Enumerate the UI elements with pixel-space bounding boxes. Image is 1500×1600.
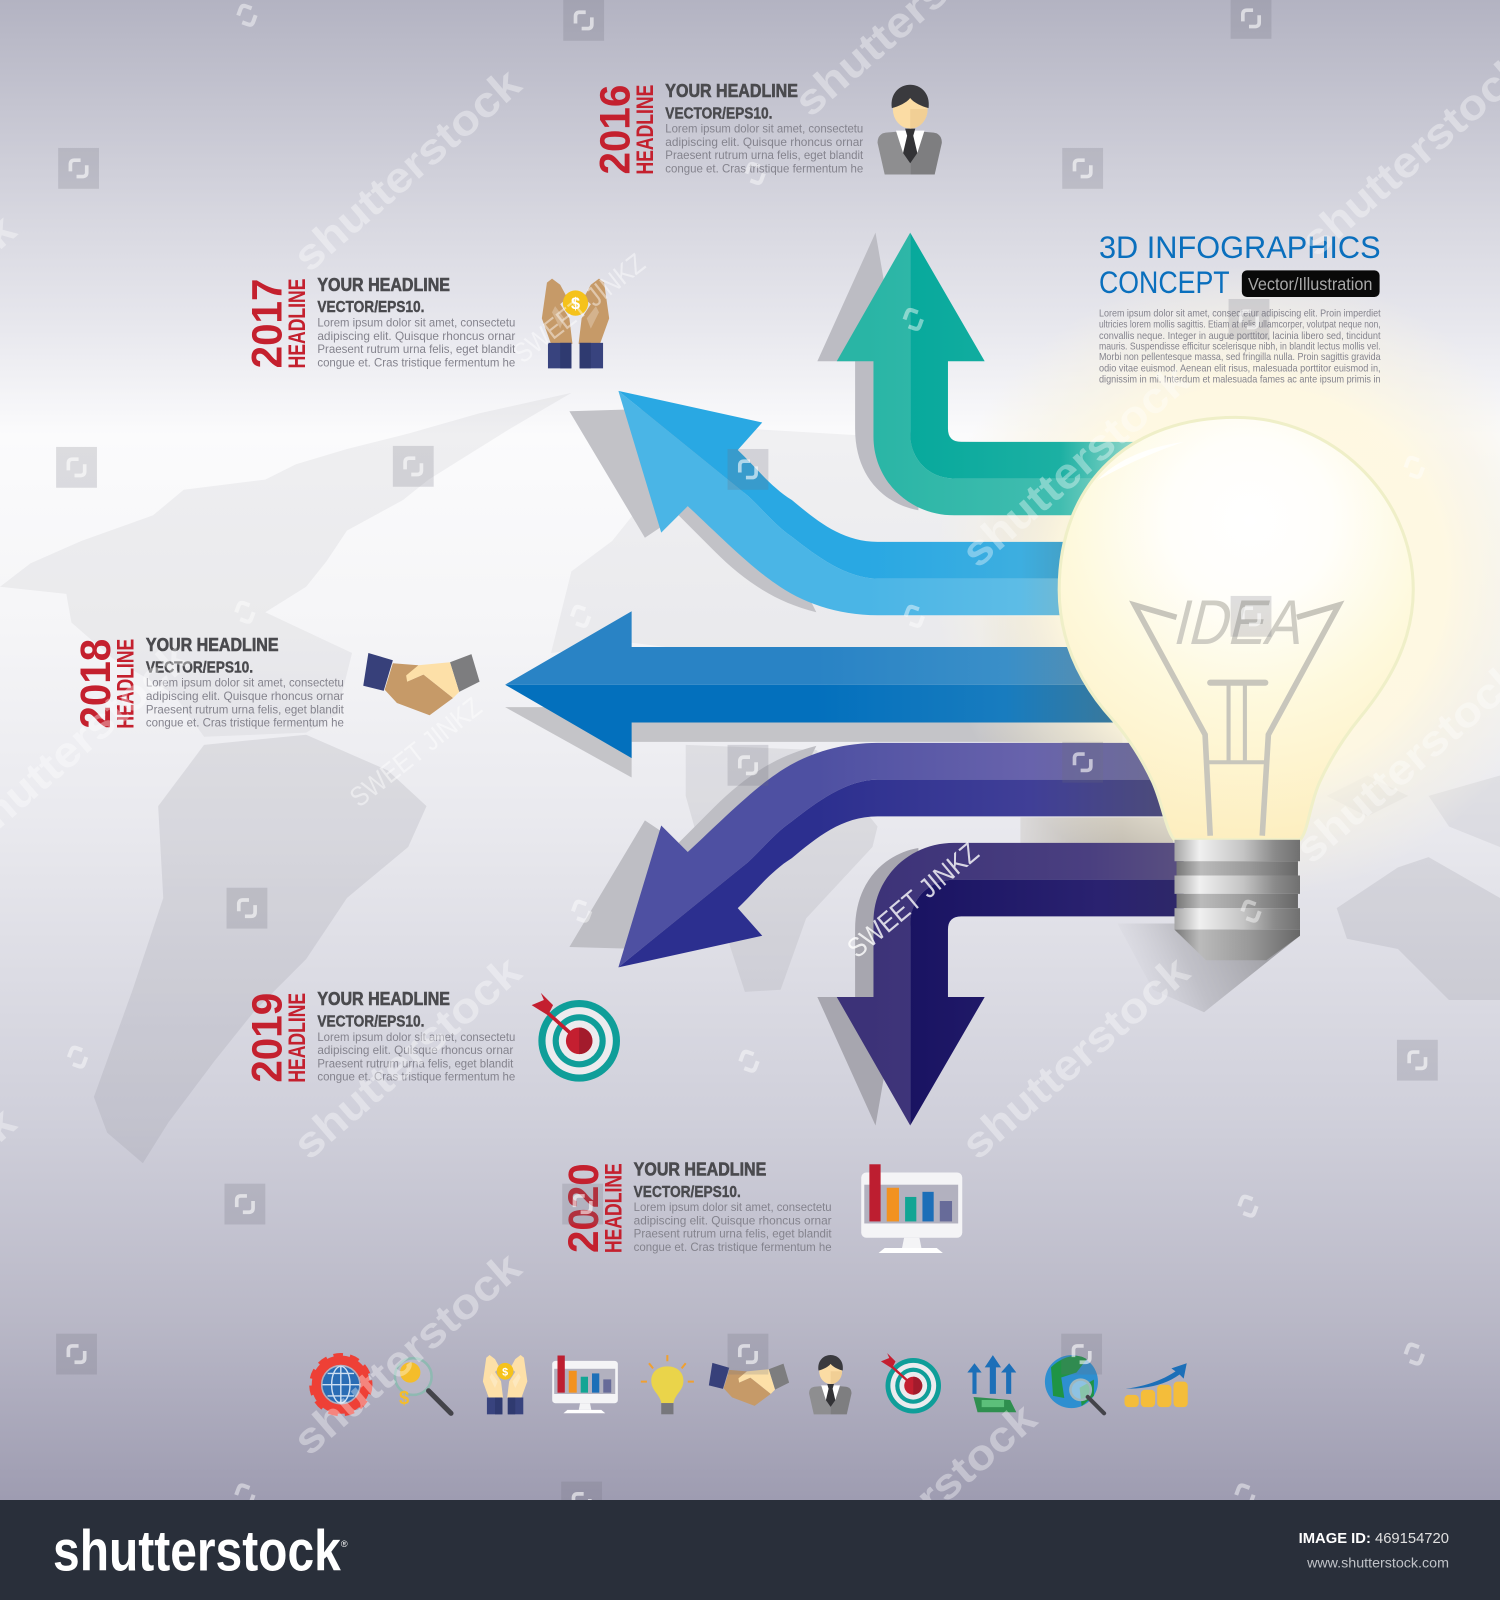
site url: www.shutterstock.com: [1306, 1555, 1449, 1571]
text block: 2019: adipiscing elit. Quisque rhoncus ornar: [317, 1044, 513, 1057]
text block: 2020: congue et. Cras tristique fermentum he: [634, 1241, 832, 1254]
title: CONCEPT: [1099, 264, 1230, 300]
arrow 2018: blue left: [505, 611, 1133, 758]
text block: 2017: HEADLINE: [284, 279, 311, 368]
icon: target: [532, 993, 620, 1082]
registered mark: ®: [341, 1539, 348, 1549]
text block: 2018: congue et. Cras tristique fermentum he: [146, 717, 344, 730]
text block: 2019: HEADLINE: [284, 993, 311, 1083]
text block: 2020: 2020: [560, 1163, 608, 1253]
icon: gear globe: [312, 1356, 369, 1413]
SWEET JINKZ watermarks: SWEET JINKZ: [841, 836, 985, 964]
metal screw base: [1174, 840, 1300, 960]
SWEET JINKZ watermarks: SWEET JINKZ: [344, 691, 488, 813]
text block: 2017: VECTOR/EPS10.: [317, 299, 424, 316]
bulb glow: [898, 235, 1500, 929]
icon: small monitor: [552, 1356, 618, 1413]
arrow shadows: [505, 233, 1173, 1126]
icon: small businessman: [809, 1355, 851, 1414]
text block: 2017: congue et. Cras tristique fermentum he: [317, 356, 515, 369]
text block: 2016: Lorem ipsum dolor sit amet, consectetu: [665, 123, 863, 136]
text block: 2017: YOUR HEADLINE: [317, 274, 450, 295]
footer logo: shutterstock: [53, 1519, 341, 1583]
icon: small bulb: [641, 1355, 694, 1414]
text block: 2017: Lorem ipsum dolor sit amet, consectetu: [317, 317, 515, 330]
text block: 2017: adipiscing elit. Quisque rhoncus ornar: [317, 330, 515, 343]
SWEET JINKZ watermarks: SWEET JINKZ: [507, 247, 651, 369]
shutterstock watermarks: shutterstock: [284, 1243, 531, 1465]
icon: arrows with money: [967, 1355, 1016, 1412]
text block: 2018: Praesent rutrum urna felis, eget blandit: [146, 703, 345, 716]
text block: 2019: Lorem ipsum dolor sit amet, consectetu: [317, 1031, 515, 1044]
text block: 2020: Praesent rutrum urna felis, eget blandit: [634, 1228, 832, 1241]
shutterstock watermarks: shutterstock: [284, 947, 531, 1169]
text block: 2016: YOUR HEADLINE: [665, 80, 798, 101]
lightbulb base shadow: [1117, 923, 1300, 1012]
text block: 2018: VECTOR/EPS10.: [146, 659, 253, 676]
text block: 2016: [592, 80, 864, 175]
text block: 2018: Lorem ipsum dolor sit amet, consectetu: [146, 677, 344, 690]
icon: businessman: [878, 85, 942, 174]
intro paragraph: ultricies lorem mollis sagittis. Etiam at felis ullamcorper, volutpat neque non,: [1099, 320, 1381, 331]
bulb highlight: [1097, 442, 1184, 481]
intro paragraph: [1099, 308, 1381, 386]
image id: IMAGE ID: 469154720: [1299, 1531, 1449, 1547]
icon: monitor with bar chart: [861, 1164, 962, 1253]
text block: 2019: [244, 988, 515, 1084]
text block: 2018: HEADLINE: [113, 639, 140, 729]
icon: coins with rising arrow: [1124, 1363, 1188, 1407]
title: 3D INFOGRAPHICS: [1099, 229, 1381, 265]
icon: globe with magnifier: [1045, 1355, 1104, 1413]
text block: 2020: adipiscing elit. Quisque rhoncus ornar: [634, 1214, 832, 1227]
bulb glass: [1059, 417, 1413, 840]
text block: 2019: congue et. Cras tristique fermentum he: [317, 1071, 515, 1084]
icon row: [312, 1353, 1188, 1414]
text block: 2017: [244, 274, 516, 369]
intro paragraph: dignissim in mi. Interdum et malesuada fames ac ante ipsum primis in: [1099, 375, 1381, 386]
icon: small target: [881, 1353, 941, 1413]
text block: 2016: Praesent rutrum urna felis, eget blandit: [665, 149, 864, 162]
intro paragraph: Morbi non pellentesque massa, sed fringilla nulla. Proin sagittis gravida: [1099, 352, 1381, 363]
text block: 2020: VECTOR/EPS10.: [634, 1184, 741, 1201]
text block: 2016: VECTOR/EPS10.: [665, 105, 772, 122]
intro paragraph: convallis neque. Integer in augue porttitor, lacinia libero sed, tincidunt: [1099, 331, 1381, 342]
icon: magnifier with dollar: $: [399, 1387, 409, 1408]
text block: 2016: adipiscing elit. Quisque rhoncus ornar: [665, 136, 863, 149]
text block: 2019: VECTOR/EPS10.: [317, 1014, 424, 1031]
arrow 2016: teal up: [837, 233, 1148, 515]
intro paragraph: mauris. Suspendisse efficitur scelerisque nibh, in blandit lectus mollis vel.: [1099, 341, 1381, 352]
icon: hands holding coin: [542, 279, 609, 368]
shutterstock watermarks: shutterstock: [284, 59, 531, 281]
text block: 2018: [72, 634, 345, 730]
text block: 2020: [560, 1159, 832, 1254]
icon: magnifier with dollar: [395, 1358, 451, 1413]
arrow 2019: purple down-left: [618, 743, 1173, 967]
text block: 2019: YOUR HEADLINE: [317, 988, 450, 1009]
icon: small hands: [483, 1355, 527, 1414]
badge: Vector/Illustration: Vector/Illustration: [1248, 274, 1372, 294]
text block: 2017: 2017: [244, 279, 292, 368]
text block: 2018: YOUR HEADLINE: [146, 634, 279, 655]
title: [1099, 229, 1381, 300]
arrow 2017: light blue up-left: [618, 391, 1122, 615]
text block: 2016: 2016: [592, 85, 640, 174]
icon: handshake: [363, 653, 480, 715]
shutterstock watermarks: shutterstock: [953, 947, 1199, 1169]
text block: 2017: Praesent rutrum urna felis, eget blandit: [317, 343, 516, 356]
text block: 2019: Praesent rutrum urna felis, eget blandit: [317, 1057, 514, 1070]
lightbulb: [1059, 417, 1413, 960]
text block: 2016: congue et. Cras tristique fermentum he: [665, 162, 863, 175]
intro paragraph: odio vitae euismod. Aenean elit risus, malesuada porttitor euismod in,: [1099, 363, 1381, 374]
shutterstock watermarks: shutterstock: [953, 355, 1199, 577]
intro paragraph: Lorem ipsum dolor sit amet, consectetur adipiscing elit. Proin imperdiet: [1099, 308, 1381, 319]
text block: 2019: 2019: [244, 993, 292, 1083]
text block: 2020: Lorem ipsum dolor sit amet, consectetu: [634, 1201, 832, 1214]
SWEET JINKZ watermarks: [344, 247, 985, 964]
text block: 2018: adipiscing elit. Quisque rhoncus ornar: [146, 690, 344, 703]
text block: 2016: HEADLINE: [632, 85, 659, 174]
icon: small handshake: [709, 1363, 789, 1406]
arrow 2020: navy down: [837, 843, 1184, 1126]
text block: 2020: YOUR HEADLINE: [634, 1159, 766, 1180]
filament: [1135, 605, 1339, 836]
text block: 2018: 2018: [72, 639, 120, 729]
text block: 2020: HEADLINE: [600, 1163, 627, 1253]
IDEA lettering: IDEA: [1168, 587, 1313, 658]
world map: [0, 393, 1500, 1163]
footer bar: [0, 1500, 1500, 1600]
